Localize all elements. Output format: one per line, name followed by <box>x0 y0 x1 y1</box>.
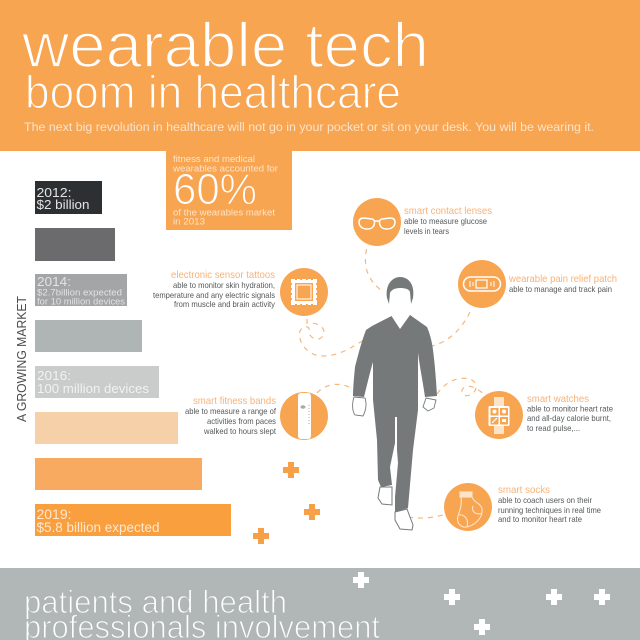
bar: 2013 <box>35 228 115 261</box>
feature: smart contact lenses: able to measure glucose <box>404 216 487 226</box>
feature: smart contact lenses <box>353 198 492 246</box>
title: wearable tech <box>21 11 429 81</box>
feature: smart watches: and all-day calorie burnt, <box>527 413 611 423</box>
feature: smart contact lenses: smart contact lenses <box>404 205 492 217</box>
left shoe <box>378 487 392 505</box>
bar: 2014: for 10 million devices <box>37 296 125 306</box>
icon: sock <box>458 492 482 527</box>
feature: wearable pain relief patch: able to manage and track pain <box>509 284 612 294</box>
feature: smart contact lenses: levels in tears <box>404 226 449 236</box>
footer heading <box>24 584 380 640</box>
footer heading: patients and health <box>24 584 287 620</box>
feature: smart watches: able to monitor heart rate <box>527 404 613 414</box>
icon: bandage <box>464 277 500 291</box>
icon: glasses <box>359 218 395 229</box>
feature: smart fitness bands: walked to hours slept <box>203 426 277 436</box>
bar: 2018 <box>35 458 202 490</box>
bar: 2015 <box>35 320 142 352</box>
feature: electronic sensor tattoos: temperature and any electric signals <box>153 290 275 300</box>
feature: electronic sensor tattoos <box>153 268 328 316</box>
feature: electronic sensor tattoos: electronic sensor tattoos <box>171 269 275 281</box>
bar: 2016: 2016: <box>37 368 71 383</box>
bar: 2016 <box>35 366 159 398</box>
subtitle: The next big revolution in healthcare will not go in your pocket or sit on your desk. You will be wearing it. <box>24 120 594 134</box>
bar: 2014: 2014: <box>37 275 71 289</box>
feature: smart watches <box>475 391 613 439</box>
person silhouette <box>353 277 437 530</box>
bar: 2014: $2.7billion expected <box>37 288 122 298</box>
header banner <box>0 0 640 151</box>
title: boom in healthcare <box>25 66 401 118</box>
feature: smart watches: smart watches <box>527 393 589 405</box>
feature: smart socks: running techniques in real time <box>498 505 601 515</box>
feature: smart socks: able to coach users on their <box>498 495 592 505</box>
feature: smart watches: to read pulse,... <box>527 423 580 433</box>
right hand <box>423 398 436 411</box>
bar: 2019: 2019: <box>36 507 72 522</box>
callout: 60 percent: 60% <box>173 165 257 214</box>
white crosses <box>353 572 610 635</box>
axis label: a growing market: A GROWING MARKET <box>15 296 29 422</box>
feature: wearable pain relief patch: wearable pain relief patch <box>508 273 617 285</box>
bar chart: growing market <box>35 181 231 536</box>
feature: smart fitness bands: smart fitness bands <box>193 395 276 407</box>
left hand <box>353 397 366 416</box>
footer section <box>0 568 640 640</box>
title <box>21 11 429 118</box>
feature: electronic sensor tattoos: able to monitor skin hydration, <box>173 280 275 290</box>
bar: 2017 <box>35 412 178 444</box>
orange crosses <box>253 462 320 544</box>
right shoe <box>395 509 413 530</box>
feature: smart fitness bands: activities from paces <box>207 416 276 426</box>
feature: smart fitness bands: able to measure a range of <box>185 406 277 416</box>
callout: 60 percent: wearables accounted for <box>172 162 278 174</box>
feature: smart socks: and to monitor heart rate <box>498 514 582 524</box>
icon: stamp <box>290 278 318 306</box>
bar: 2014 <box>35 274 127 306</box>
body <box>353 315 437 512</box>
connector lines <box>300 249 485 518</box>
feature: wearable pain relief patch <box>458 260 617 308</box>
feature: smart socks: smart socks <box>498 484 550 496</box>
bar: 2016: 100 million devices <box>37 381 149 396</box>
bar: 2012: 2012: <box>36 185 72 200</box>
callout: 60 percent: fitness and medical <box>173 153 255 164</box>
callout: 60 percent <box>166 151 292 230</box>
bar: 2019: $5.8 billion expected <box>36 520 160 535</box>
callout: 60 percent: in 2013 <box>173 216 205 226</box>
feature: electronic sensor tattoos: from muscle and brain activity <box>174 299 276 309</box>
feature: smart fitness bands <box>185 392 328 440</box>
bar: 2012 <box>35 181 102 214</box>
icon: fitness band <box>298 393 311 439</box>
feature: smart socks <box>444 483 601 531</box>
callout: 60 percent: of the wearables market <box>173 206 275 218</box>
icon: watch <box>488 397 510 434</box>
bar: 2012: $2 billion <box>36 197 90 212</box>
hair <box>387 277 413 304</box>
bar: 2019 <box>35 504 231 536</box>
